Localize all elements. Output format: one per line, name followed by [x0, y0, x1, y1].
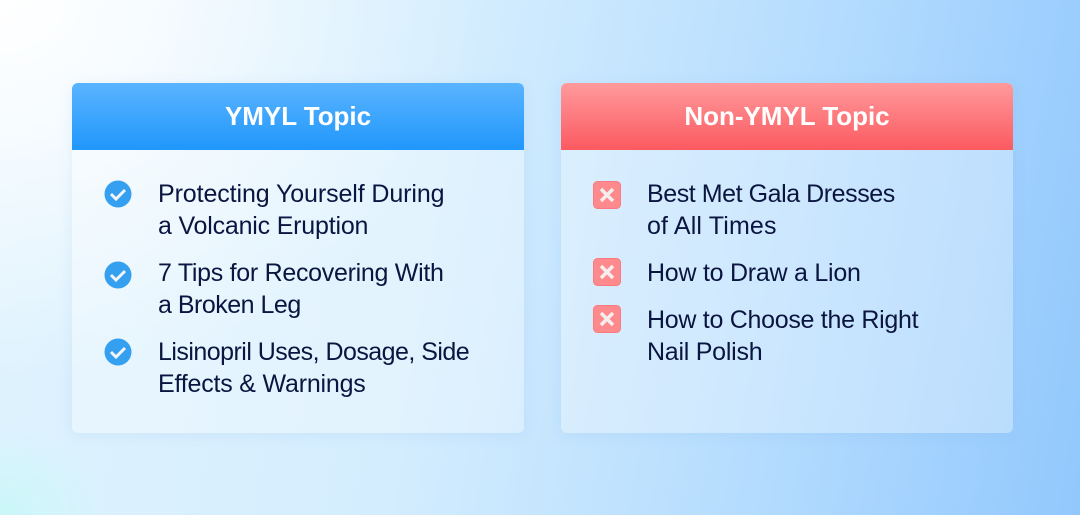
- panel: Non-YMYL topic: [561, 83, 1013, 433]
- icon: check 2: [104, 262, 132, 288]
- panel: YMYL topic: [72, 83, 524, 433]
- text: item 2: [158, 259, 444, 319]
- heading: Non-YMYL Topic: [561, 83, 1013, 150]
- heading: YMYL Topic: YMYL Topic: [225, 101, 371, 131]
- text: item 3: How to Choose the Right: [647, 306, 918, 334]
- text: item 1: [647, 180, 895, 240]
- text: item 1: [158, 180, 444, 240]
- text: item 1: a Volcanic Eruption: [158, 212, 368, 240]
- icon: check 3: [104, 338, 132, 366]
- text: item 3: [647, 306, 918, 366]
- text: item 3: Effects & Warnings: [158, 370, 366, 398]
- icon: cross 3: [593, 305, 621, 333]
- text: item 1: of All Times: [647, 212, 777, 240]
- heading: Non-YMYL Topic: Non-YMYL Topic: [684, 101, 890, 131]
- text: item 2: 7 Tips for Recovering With: [158, 259, 444, 287]
- text: item 1: Protecting Yourself During: [158, 180, 444, 208]
- heading: YMYL Topic: [72, 83, 524, 150]
- text: item 3: Nail Polish: [647, 338, 762, 366]
- text: item 1: Best Met Gala Dresses: [647, 180, 895, 208]
- icon: cross 1: [593, 181, 621, 209]
- icon: cross 2: [593, 258, 621, 286]
- text: item 3: [158, 338, 469, 398]
- text: item 2: a Broken Leg: [158, 291, 301, 319]
- icon: check 1: [104, 180, 132, 208]
- text: item 2: How to Draw a Lion: [647, 259, 861, 287]
- text: item 3: Lisinopril Uses, Dosage, Side: [158, 338, 469, 366]
